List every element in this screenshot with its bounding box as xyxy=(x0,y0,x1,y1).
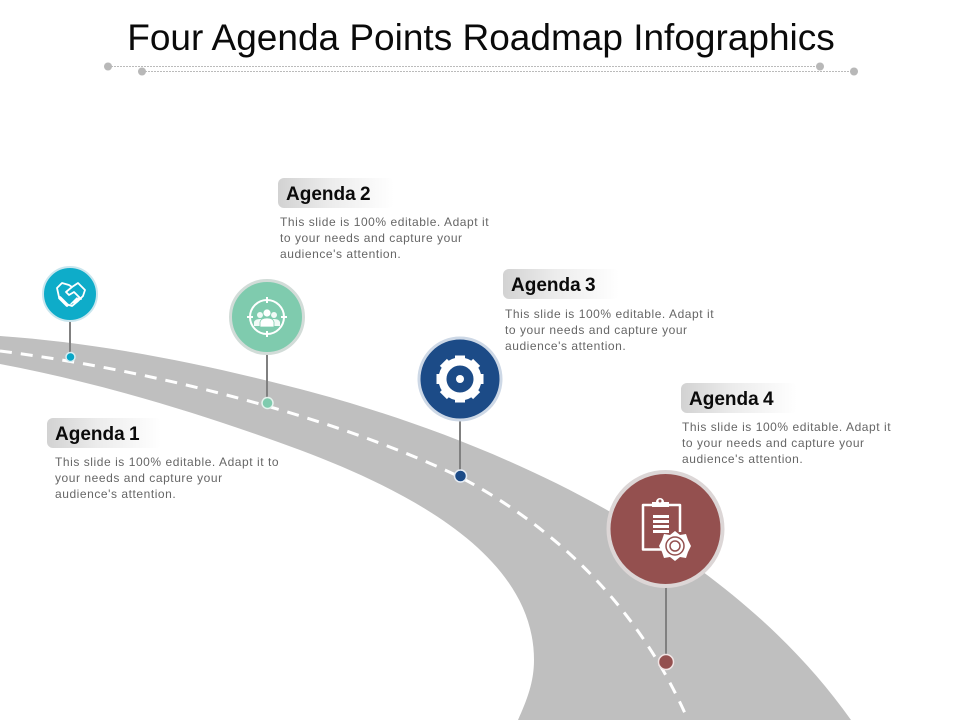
text: agenda 2: to your needs and capture your xyxy=(280,231,463,245)
label: agenda 1: Agenda 1 xyxy=(55,424,140,445)
text: agenda 1 xyxy=(55,455,279,501)
label: agenda 2: Agenda 2 xyxy=(286,184,371,205)
text: agenda 2: audience's attention. xyxy=(280,247,401,261)
text: agenda 3: audience's attention. xyxy=(505,339,626,353)
marker: agenda 3 xyxy=(419,338,501,482)
title: Four Agenda Points Roadmap Infographics xyxy=(127,17,835,58)
label: agenda 3: Agenda 3 xyxy=(511,275,596,296)
text: agenda 4 xyxy=(682,420,891,466)
icon: clipboard with gear xyxy=(643,498,691,561)
road centre dashes xyxy=(0,351,688,720)
text: agenda 1: This slide is 100% editable. Adapt it to xyxy=(55,455,279,469)
icon: handshake xyxy=(57,283,85,306)
icon: team target xyxy=(247,297,287,337)
text: agenda 1: audience's attention. xyxy=(55,487,176,501)
text: agenda 1: your needs and capture your xyxy=(55,471,223,485)
text: agenda 2: This slide is 100% editable. Adapt it xyxy=(280,215,489,229)
label: agenda 2 xyxy=(278,178,394,208)
text: agenda 3 xyxy=(505,307,714,353)
text: agenda 4: audience's attention. xyxy=(682,452,803,466)
text: agenda 2 xyxy=(280,215,489,261)
text: agenda 4: This slide is 100% editable. Adapt it xyxy=(682,420,891,434)
marker: agenda 1 xyxy=(43,267,97,362)
text: agenda 3: This slide is 100% editable. Adapt it xyxy=(505,307,714,321)
road xyxy=(0,336,851,720)
label: agenda 3 xyxy=(503,269,619,299)
marker: agenda 4 xyxy=(608,472,722,670)
text: agenda 4: to your needs and capture your xyxy=(682,436,865,450)
label: agenda 4: Agenda 4 xyxy=(689,389,774,410)
marker: agenda 2 xyxy=(230,280,304,408)
label: agenda 4 xyxy=(681,383,797,413)
title divider xyxy=(104,62,858,76)
label: agenda 1 xyxy=(47,418,161,448)
icon: gear xyxy=(427,346,493,412)
text: agenda 3: to your needs and capture your xyxy=(505,323,688,337)
